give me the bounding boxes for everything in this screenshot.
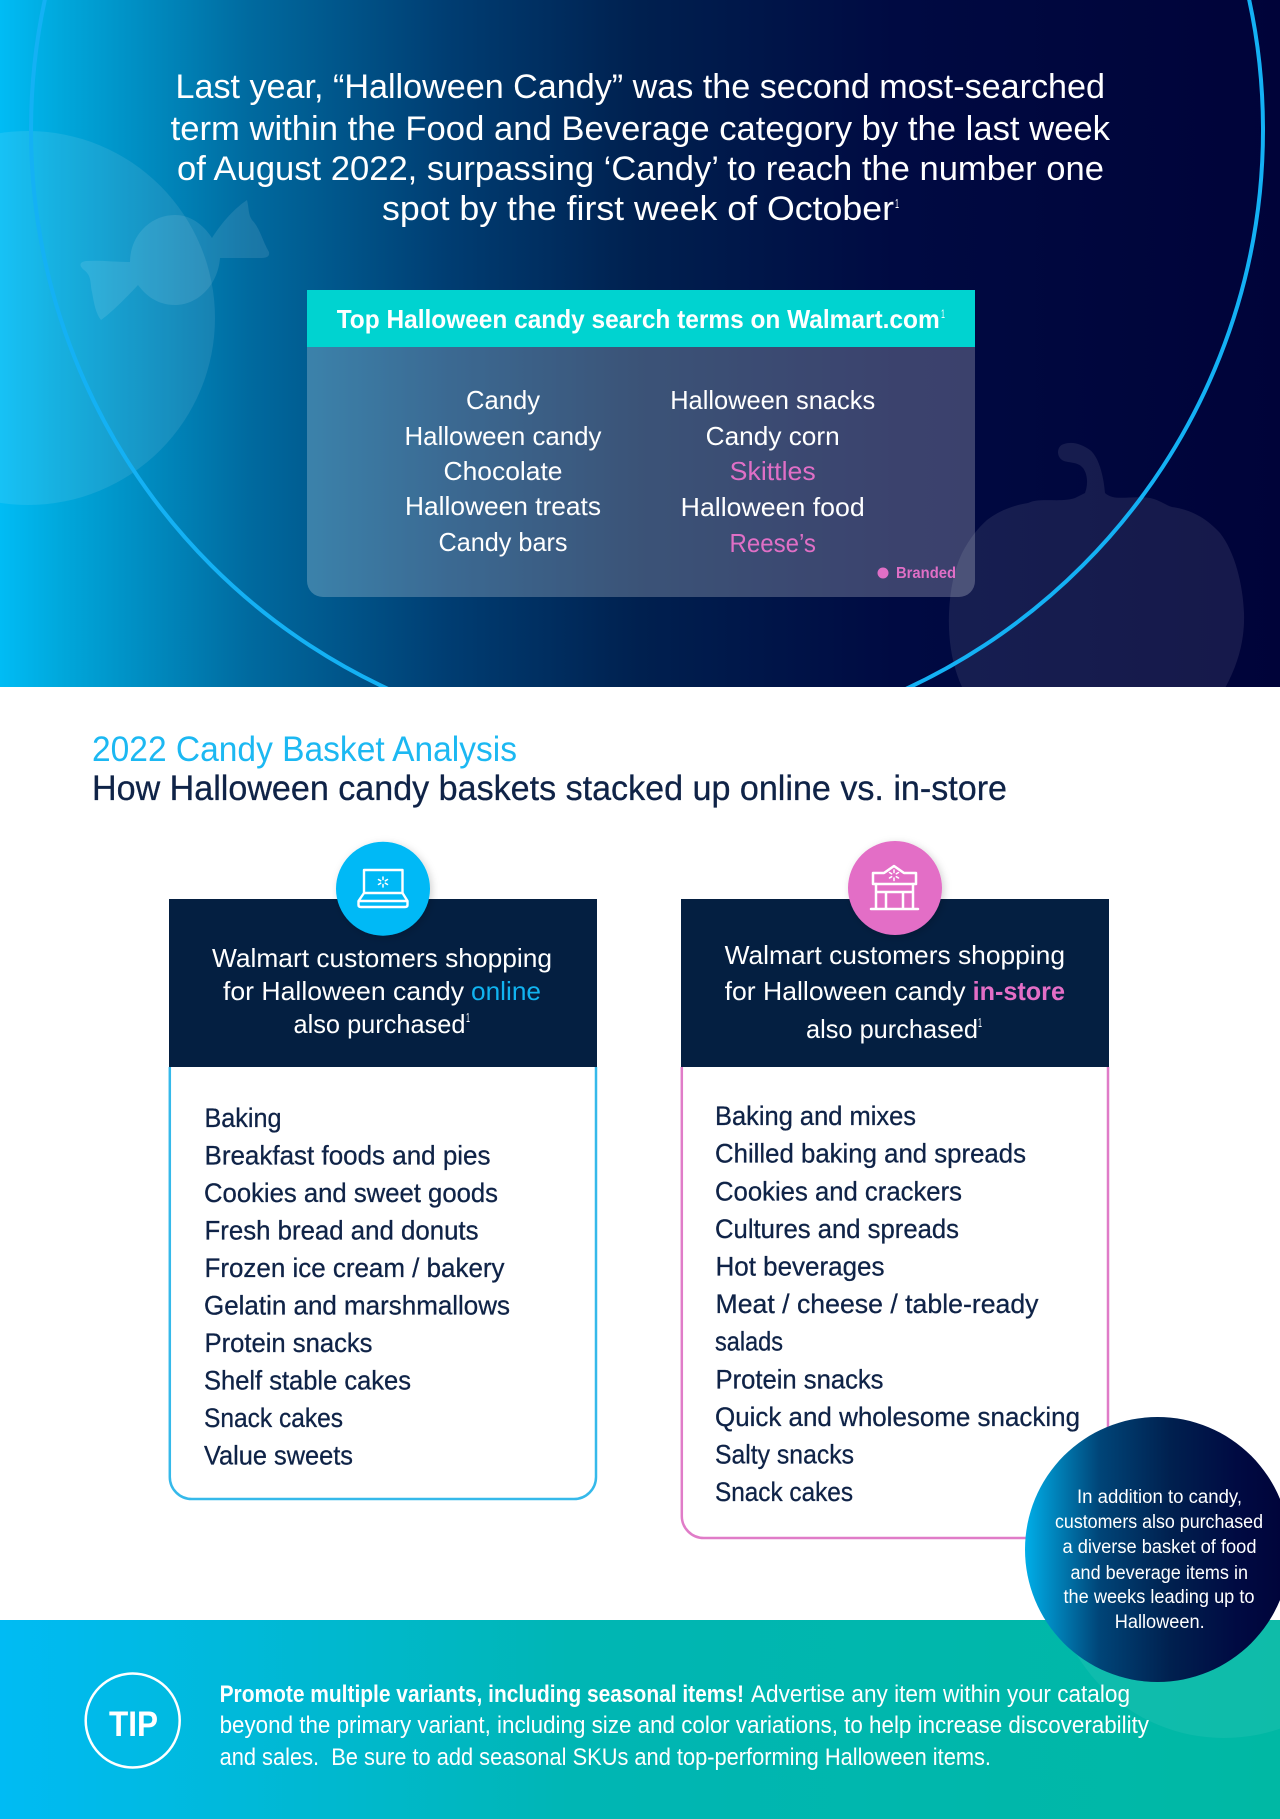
search terms column 2: Halloween food — [681, 492, 865, 522]
in-store list: Meat / cheese / table-ready — [716, 1289, 1039, 1319]
search terms column 1: Candy — [466, 385, 540, 415]
section heading: How Halloween candy baskets stacked up online vs. in-store — [92, 769, 1007, 808]
search terms column 1 — [404, 385, 602, 557]
headline: 1 — [895, 196, 899, 211]
online list: Snack cakes — [204, 1403, 343, 1433]
header text: Walmart customers shopping — [725, 940, 1065, 970]
header text: in-store — [973, 976, 1065, 1006]
search terms column 1: Chocolate — [444, 456, 562, 486]
online list: Gelatin and marshmallows — [204, 1290, 510, 1320]
callout circle: and beverage items in — [1070, 1563, 1248, 1584]
search terms column 2: Skittles — [730, 456, 816, 486]
online list: Baking — [204, 1103, 282, 1133]
tip text: beyond the primary variant, including size and color variations, to help increase discoverability — [220, 1712, 1149, 1739]
decorative candy backdrop circle — [0, 131, 215, 505]
headline — [171, 68, 1111, 228]
in-store list: Baking and mixes — [715, 1101, 916, 1131]
online list: Shelf stable cakes — [204, 1366, 411, 1396]
in-store list: Cookies and crackers — [715, 1176, 962, 1206]
online list: Breakfast foods and pies — [204, 1140, 490, 1170]
list box outline — [682, 1067, 1108, 1538]
tip badge: TIP — [109, 1705, 158, 1744]
panel: online basket — [169, 842, 597, 1499]
header text: also purchased — [806, 1014, 978, 1044]
header text: online — [471, 976, 541, 1006]
legend: branded: Branded — [896, 565, 956, 582]
search terms column 2: Candy corn — [706, 421, 840, 451]
table body — [307, 347, 975, 597]
in-store list: Protein snacks — [716, 1364, 884, 1394]
search terms column 2: Reese’s — [729, 528, 816, 558]
panel: in-store basket — [681, 841, 1109, 1538]
callout circle: customers also purchased — [1055, 1512, 1263, 1533]
online list: Value sweets — [204, 1440, 353, 1470]
table title: Top Halloween candy search terms on Walmart.com — [337, 304, 940, 334]
headline: Last year, “Halloween Candy” was the second most-searched — [176, 68, 1105, 106]
in-store list: Hot beverages — [716, 1252, 884, 1282]
online list: Fresh bread and donuts — [204, 1216, 478, 1246]
headline: term within the Food and Beverage category by the last week — [171, 110, 1111, 148]
search terms column 1: Candy bars — [438, 527, 568, 557]
online list: Cookies and sweet goods — [204, 1178, 498, 1208]
callout circle — [1025, 1417, 1280, 1682]
panel: tip band — [0, 1620, 1280, 1819]
callout circle: Halloween. — [1115, 1612, 1205, 1633]
decorative ring — [31, 0, 1263, 746]
in-store list: Salty snacks — [715, 1440, 854, 1470]
section heading — [92, 730, 1007, 808]
in-store list: salads — [715, 1327, 783, 1357]
headline: spot by the first week of October — [382, 190, 894, 228]
table header bar — [307, 290, 975, 347]
header bar — [169, 899, 597, 1067]
header text — [725, 940, 1065, 1044]
search terms column 2: Halloween snacks — [670, 385, 875, 415]
headline: of August 2022, surpassing ‘Candy’ to reach the number one — [177, 150, 1104, 188]
in-store list: Chilled baking and spreads — [715, 1139, 1026, 1169]
tip text: and sales. Be sure to add seasonal SKUs and top-performing Halloween items. — [220, 1744, 991, 1771]
in-store list: Cultures and spreads — [715, 1214, 959, 1244]
panel: hero banner — [0, 0, 1280, 746]
in-store list: Snack cakes — [715, 1477, 853, 1507]
tip badge — [86, 1674, 180, 1768]
in-store list: Quick and wholesome snacking — [715, 1402, 1080, 1432]
header bar — [681, 899, 1109, 1067]
icon: pumpkin silhouette — [949, 443, 1244, 690]
header text: Walmart customers shopping — [212, 943, 552, 973]
header text — [212, 943, 552, 1039]
header text: 1 — [978, 1015, 982, 1030]
icon: laptop — [336, 842, 430, 936]
search terms column 1: Halloween candy — [404, 421, 602, 451]
icon: storefront — [848, 841, 942, 935]
callout circle: In addition to candy, — [1077, 1487, 1242, 1508]
tip text: Promote multiple variants, including seasonal items! — [220, 1681, 744, 1708]
search terms column 1: Halloween treats — [405, 491, 601, 521]
header text: also purchased — [294, 1009, 466, 1039]
online list — [204, 1103, 510, 1470]
online list: Frozen ice cream / bakery — [204, 1253, 505, 1283]
panel: top search terms table — [307, 290, 975, 597]
section heading: 2022 Candy Basket Analysis — [92, 730, 517, 769]
tip text: Advertise any item within your catalog — [751, 1681, 1130, 1708]
header text: 1 — [466, 1010, 470, 1025]
decorative lighter circle — [1076, 1620, 1280, 1738]
search terms column 2 — [670, 385, 875, 558]
header text: for Halloween candy — [725, 976, 966, 1006]
table title: 1 — [941, 307, 945, 321]
header text: for Halloween candy — [223, 976, 464, 1006]
in-store list — [715, 1101, 1080, 1507]
online list: Protein snacks — [204, 1328, 372, 1358]
icon: wrapped candy silhouette — [80, 200, 269, 320]
callout circle: a diverse basket of food — [1062, 1537, 1256, 1558]
tip text — [220, 1681, 1149, 1771]
list box outline — [170, 1067, 596, 1499]
callout circle: the weeks leading up to — [1064, 1587, 1254, 1608]
